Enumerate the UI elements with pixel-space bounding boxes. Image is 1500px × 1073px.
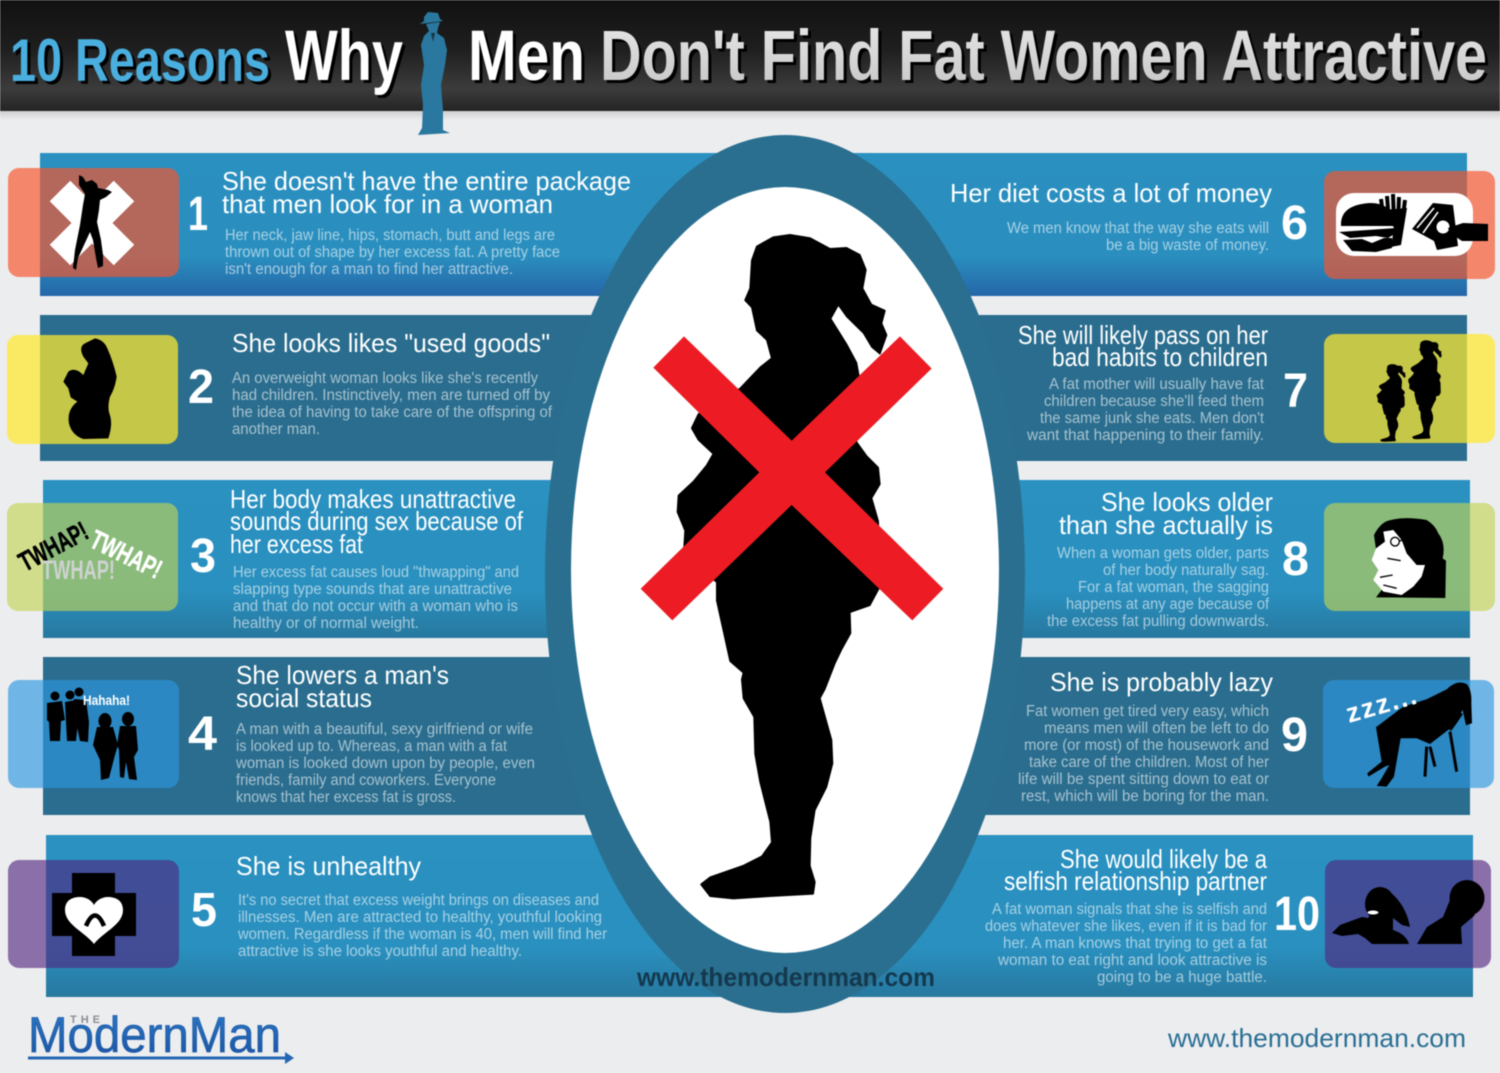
body text 8: of her body naturally sag. [1103,562,1269,579]
heading 10: selfish relationship partner [1004,866,1267,896]
icon: TWHAP sound words: TWHAP! [14,516,93,577]
body text 4: A man with a beautiful, sexy girlfriend or wife [236,721,533,738]
body text 3: Her excess fat causes loud "thwapping" and [233,564,519,581]
body text 1 [225,227,560,278]
body text 8: When a woman gets older, parts [1057,545,1269,562]
number 9: 9 [1281,709,1308,762]
center website url: www.themodernman.com [636,962,935,992]
body text 4 [235,721,535,806]
heading 4: social status [236,683,372,713]
body text 7: want that happening to their family. [1026,427,1264,444]
body text 6: be a big waste of money. [1106,237,1269,254]
icon: woman on phone and man turned away [1332,880,1484,944]
number 8: 8 [1282,533,1309,586]
body text 5 [237,892,607,960]
panel: reason 2 [7,315,785,461]
fat woman silhouette [677,235,887,898]
body text 8 [1047,545,1270,630]
body text 2: An overweight woman looks like she's recently [232,370,538,387]
logo: The Modern Man: ModernMan [28,1007,281,1063]
panel: reason 3 [7,480,785,638]
body text 4: friends, family and coworkers. Everyone [236,772,496,789]
heading 9: She is probably lazy [1050,667,1273,697]
body text 1: isn't enough for a man to find her attractive. [225,261,513,278]
body text 4: woman is looked down upon by people, even [235,755,535,772]
body text 9: more (or most) of the housework and [1024,737,1269,754]
callout: Hahaha: Hahaha! [83,692,130,708]
icon: TWHAP sound words: TWHAP! [85,524,167,585]
body text 10 [985,901,1268,986]
heading 10: She would likely be a [1060,844,1267,874]
heading 1 [222,166,631,219]
icon: fat mother and child silhouettes [1377,340,1442,442]
panel: reason 7 [785,315,1495,461]
icon: old woman face [1372,518,1446,598]
heading 6: Her diet costs a lot of money [950,178,1272,208]
heading 3: Her body makes unattractive [230,484,516,514]
icon: TWHAP sound words [14,516,167,585]
icon: medical cross with sad heart [52,873,136,956]
central oval with crossed-out silhouette [545,135,1025,1013]
body text 1: thrown out of shape by her excess fat. A pretty face [225,244,560,261]
body text 3 [233,564,519,632]
body text 10: A fat woman signals that she is selfish and [992,901,1267,918]
body text 1: Her neck, jaw line, hips, stomach, butt and legs are [225,227,555,244]
icon detail: white eye [1368,910,1378,914]
icon: people laughing at couple [47,688,138,780]
heading 7: bad habits to children [1052,342,1268,372]
heading 1: that men look for in a woman [222,189,553,219]
number 4: 4 [188,708,217,761]
body text 2 [232,370,553,438]
panel: reason 10 [785,835,1491,997]
body text 9: take care of the children. Most of her [1029,754,1269,771]
heading 5: She is unhealthy [236,851,421,881]
heading 8: than she actually is [1059,510,1273,540]
body text 10: woman to eat right and look attractive is [997,952,1267,969]
body text 6: We men know that the way she eats will [1007,220,1269,237]
body text 5: It's no secret that excess weight brings on diseases and [238,892,599,909]
body text 5: attractive is she looks youthful and healthy. [238,943,522,960]
body text 8: For a fat woman, the sagging [1078,579,1269,596]
body text 3: healthy or of normal weight. [233,615,419,632]
icon: TWHAP sound words: TWHAP! [42,555,115,585]
body text 9: rest, which will be boring for the man. [1021,788,1269,805]
heading 3: sounds during sex because of [230,506,524,536]
body text 3: and that do not occur with a woman who is [233,598,518,615]
number 5: 5 [191,884,217,937]
title [10,17,1487,96]
heading 4 [236,660,449,713]
heading 7 [1018,320,1268,372]
red X [641,336,943,620]
title: Men [468,17,585,96]
body text 9: means men will often be left to do [1044,720,1269,737]
logo: The Modern Man: THE [70,1014,100,1026]
panel: reason 5 [8,835,785,997]
heading 7: She will likely pass on her [1018,320,1268,350]
body text 7: the same junk she eats. Men don't [1040,410,1265,427]
number 10: 10 [1274,888,1320,941]
icon: standing man silhouette [418,12,450,135]
icon: woman with white X [60,175,124,270]
number 1: 1 [188,188,208,241]
number 7: 7 [1283,365,1308,418]
body text 3: slapping type sounds that are unattractive [233,581,512,598]
body text 7: A fat mother will usually have fat [1049,376,1265,393]
panel: reason 8 [785,480,1495,638]
number 3: 3 [190,530,216,583]
panel: reason 1 [8,153,785,296]
body text 6 [1007,220,1269,254]
heading 1: She doesn't have the entire package [222,166,631,196]
body text 10: going to be a huge battle. [1097,969,1267,986]
oval ring [545,135,1025,1013]
body text 8: the excess fat pulling downwards. [1047,613,1269,630]
body text 10: does whatever she likes, even if it is bad for [985,918,1267,935]
icon text: zzz: zzz... [1342,680,1420,729]
body text 4: is looked up to. Whereas, a man with a fat [236,738,508,755]
number 2: 2 [188,361,214,414]
body text 2: had children. Instinctively, men are turned off by [232,387,550,404]
body text 9 [1018,703,1269,805]
body text 10: her. A man knows that trying to get a fat [1003,935,1268,952]
panel: reason 6 [785,153,1495,296]
icon: pregnant mother with baby [63,338,117,439]
number 6: 6 [1281,197,1308,250]
heading 3 [230,484,524,559]
oval inner white [571,187,999,953]
body text 7: children because she'll feed them [1044,393,1264,410]
heading 2: She looks likes "used goods" [232,328,550,358]
footer website url: www.themodernman.com [1167,1023,1466,1053]
panel: reason 9 [785,657,1494,815]
header banner [0,0,1500,120]
title: Why [285,17,403,96]
body text 7 [1026,376,1265,444]
heading 3: her excess fat [230,529,364,559]
body text 5: illnesses. Men are attracted to healthy, youthful looking [238,909,602,926]
heading 8 [1059,487,1273,540]
body text 2: the idea of having to take care of the offspring of [232,404,553,421]
body text 2: another man. [232,421,320,438]
body text 4: knows that her excess fat is gross. [236,789,456,806]
title: 10 Reasons [10,27,270,94]
body text 9: Fat women get tired very easy, which [1026,703,1269,720]
icon: sleeping person on chair [1367,682,1472,787]
panel: reason 4 [8,657,785,815]
body text 9: life will be spent sitting down to eat or [1018,771,1269,788]
body text 8: happens at any age because of [1066,596,1270,613]
heading 8: She looks older [1101,487,1273,517]
body text 5: women. Regardless if the woman is 40, men will find her [237,926,607,943]
heading 4: She lowers a man's [236,660,449,690]
icon: burger, fries and money [1336,193,1488,256]
heading 10 [1004,844,1267,896]
